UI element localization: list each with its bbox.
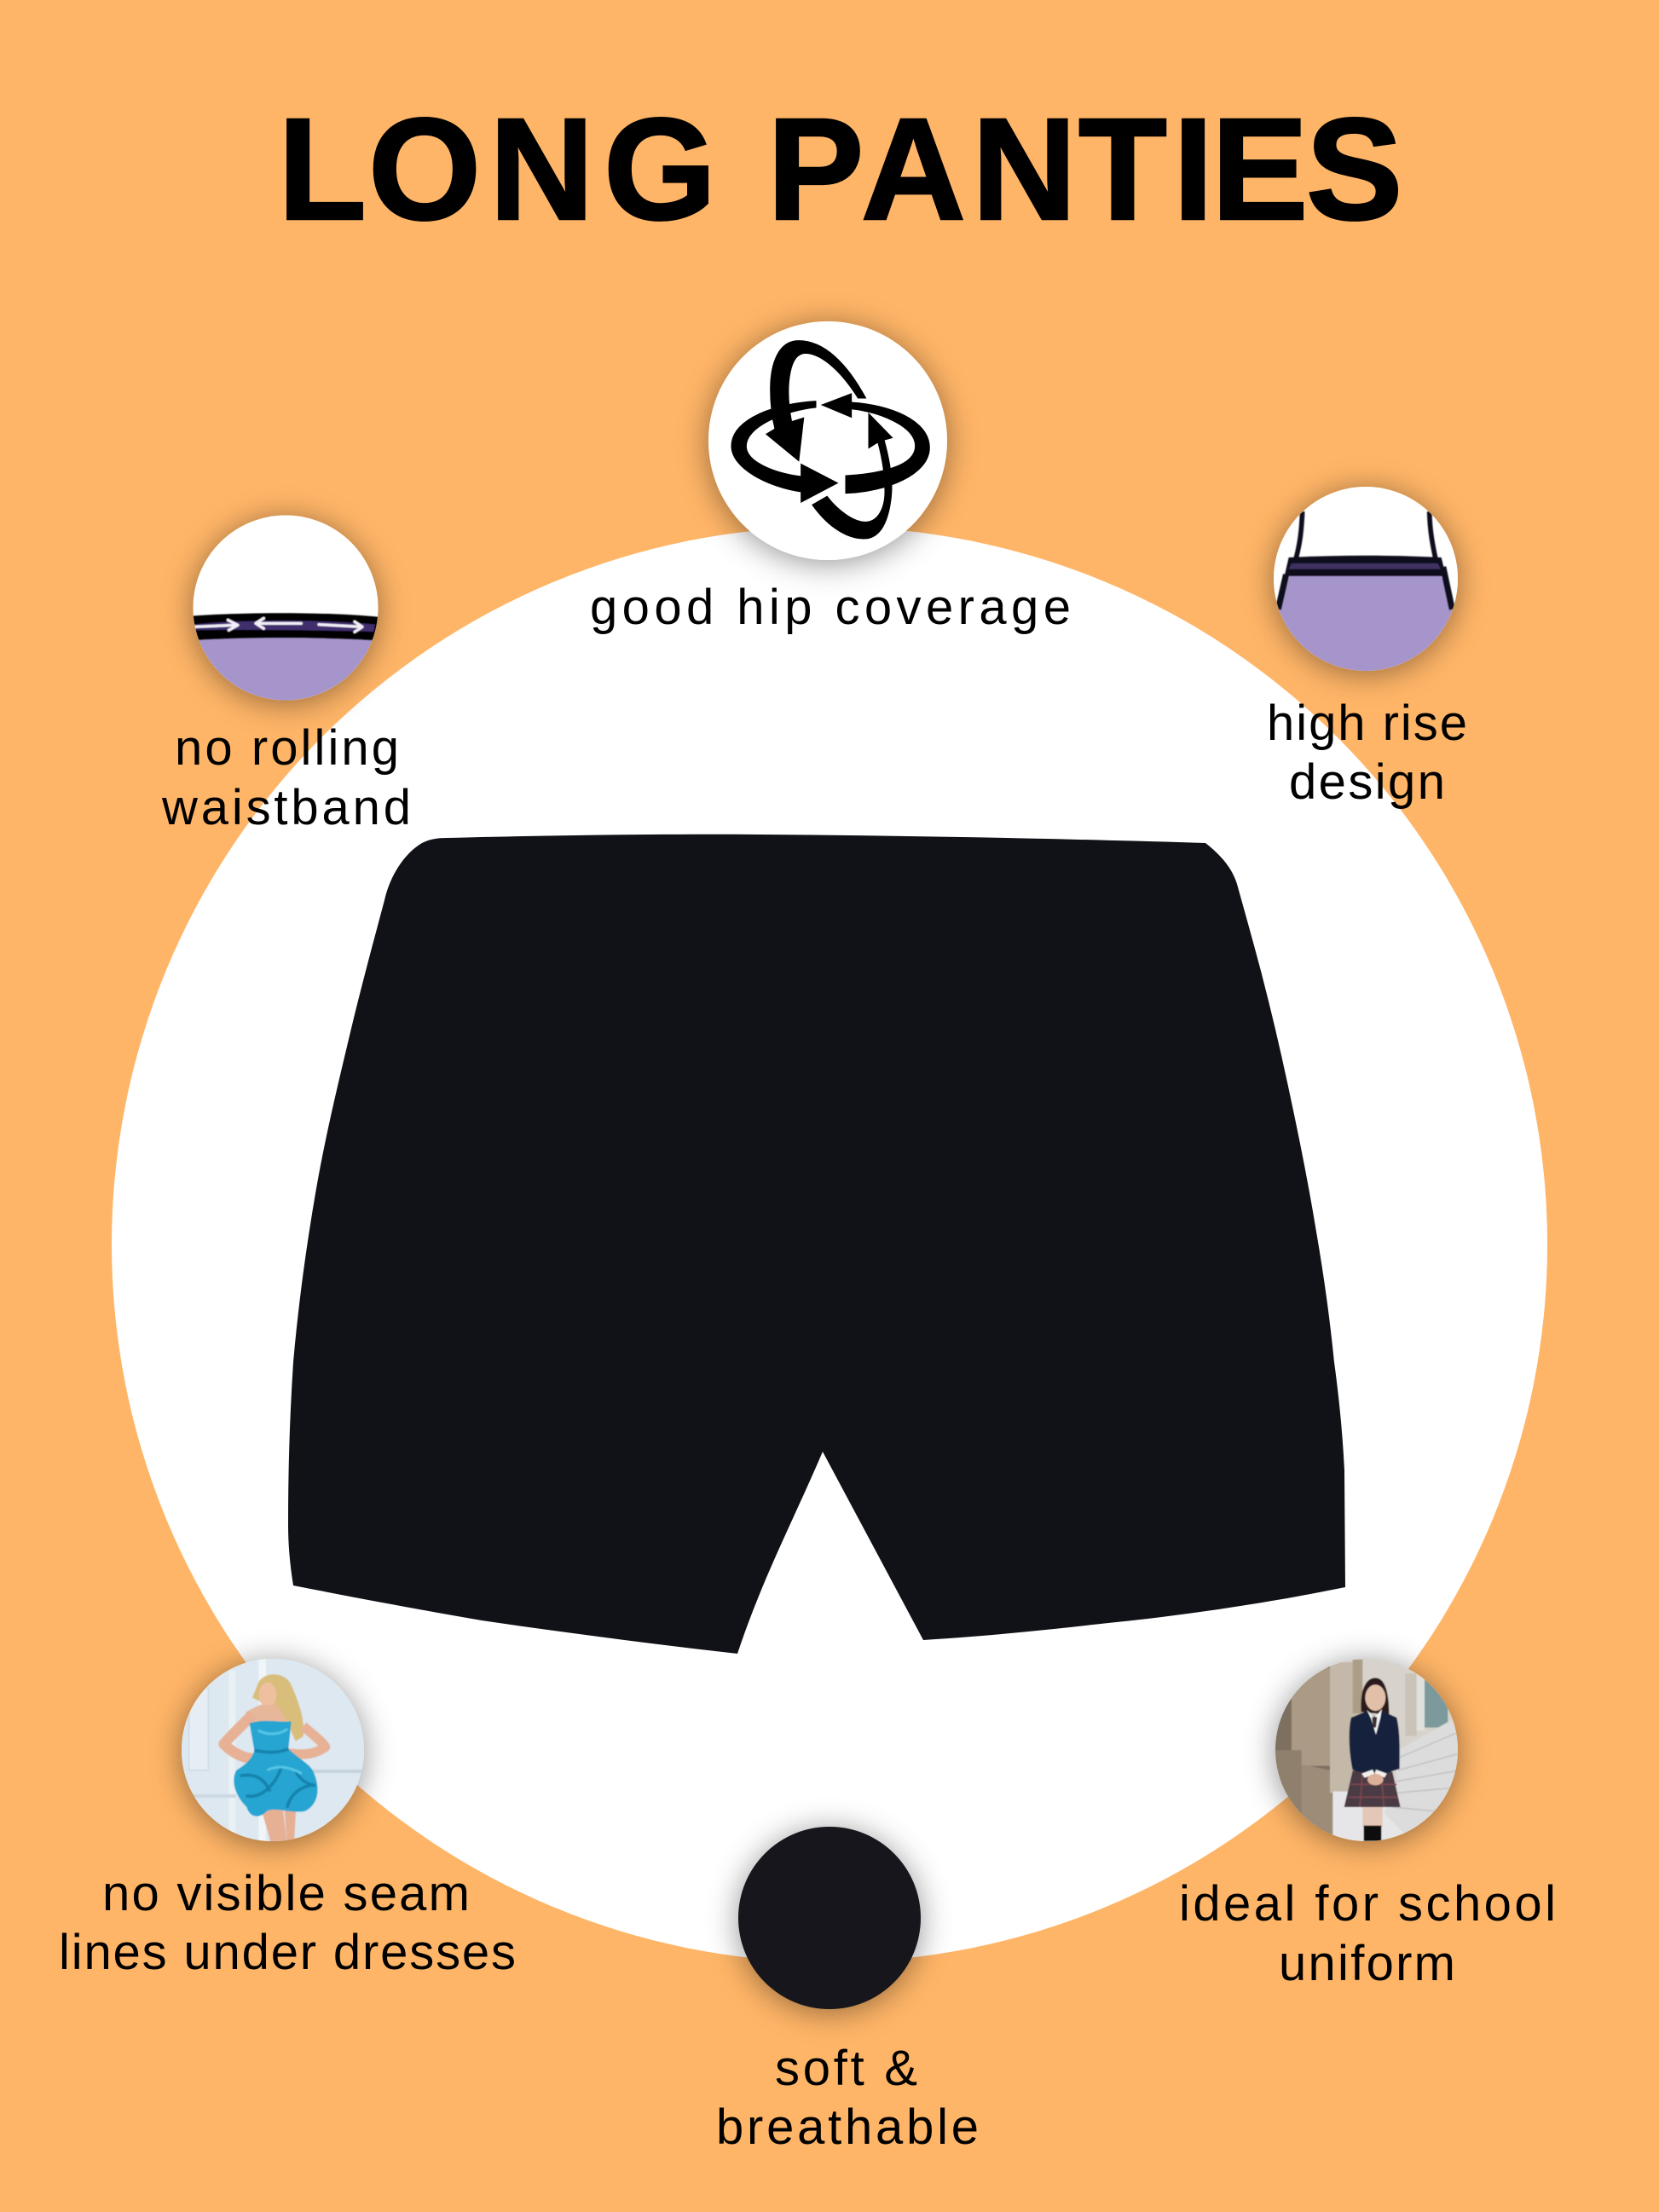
label: no visible seam lines under dresses: no visible seam — [102, 1866, 470, 1921]
shoulders and arms — [246, 1705, 286, 1723]
face — [1365, 1684, 1385, 1711]
photo badge: school uniform — [1273, 1656, 1460, 1844]
label: no visible seam lines under dresses — [59, 1866, 516, 1980]
label: no rolling waistband: waistband — [161, 780, 411, 835]
hands — [1367, 1774, 1384, 1785]
label: no visible seam lines under dresses: lines under dresses — [59, 1925, 516, 1980]
label: ideal for school uniform — [1179, 1876, 1556, 1991]
icon: rotating arrows badge — [708, 321, 947, 560]
product photo: black shorts — [288, 835, 1345, 1654]
label: soft and breathable: breathable — [716, 2099, 979, 2155]
label: good hip coverage: good hip coverage — [590, 580, 1071, 635]
arrow: lower loop — [812, 414, 892, 539]
collar, tie and cuffs — [1367, 1709, 1382, 1735]
label: soft and breathable — [716, 2041, 979, 2155]
legs — [263, 1809, 297, 1841]
dress — [234, 1721, 318, 1816]
large white circle — [112, 527, 1547, 1962]
label: no rolling waistband: no rolling — [175, 720, 399, 776]
label: high rise design: high rise — [1267, 696, 1467, 751]
icon: high rise badge — [1273, 487, 1458, 673]
arrow: vertical loop — [766, 341, 865, 460]
icon: black fabric swatch — [738, 1827, 921, 2009]
arrow: left ellipse — [731, 401, 837, 502]
socks and legs — [1362, 1807, 1383, 1827]
icon: waistband badge — [188, 515, 381, 710]
label: soft and breathable: soft & — [775, 2041, 917, 2096]
hair — [1361, 1678, 1389, 1715]
jacket — [1350, 1711, 1400, 1773]
label: high rise design: design — [1289, 754, 1445, 810]
label: ideal for school uniform: uniform — [1279, 1936, 1455, 1991]
arrow: right ellipse — [823, 394, 929, 493]
label: high rise design — [1267, 696, 1467, 810]
photo badge: blue dress — [179, 1656, 367, 1844]
label: no rolling waistband — [161, 720, 411, 835]
title: LONG PANTIES — [278, 89, 1402, 251]
label: ideal for school uniform: ideal for school — [1179, 1876, 1556, 1932]
face — [259, 1683, 276, 1707]
skirt — [1344, 1770, 1401, 1807]
hair — [252, 1674, 303, 1741]
